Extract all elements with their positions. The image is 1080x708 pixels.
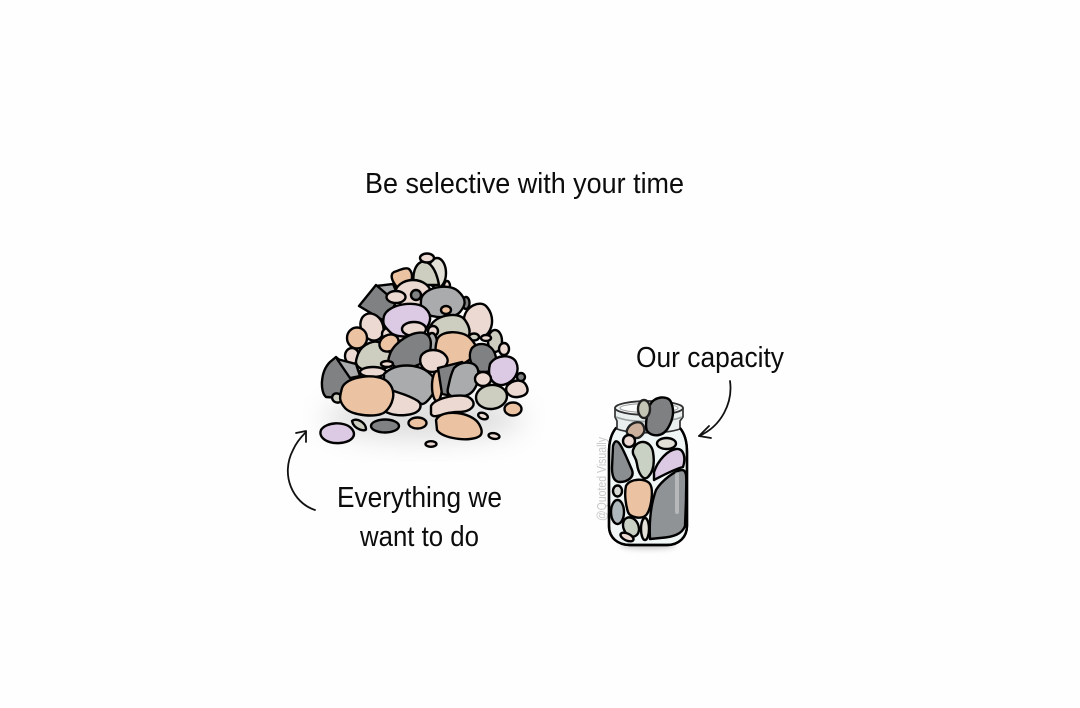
arrow: our capacity [699,381,730,438]
top stones [359,254,492,338]
middle stones [345,304,528,397]
title: Be selective with your time [365,168,684,200]
label: everything we want to do: want to do [359,521,479,553]
jar rim [615,401,683,415]
jar shadow [620,541,676,549]
watermark: @Quoted Visually [595,436,609,521]
jar highlight [675,472,679,514]
arrow: everything we want to do [288,431,315,510]
label: everything we want to do [337,482,502,553]
jar outline [609,428,687,545]
front stones [322,357,522,439]
pile shadow [324,398,524,438]
jar illustration [609,397,687,545]
label: our capacity: Our capacity [636,342,784,374]
scattered pebbles [320,418,500,447]
jar stones [611,397,686,543]
label: everything we want to do: Everything we [337,482,502,514]
jar neck and thread [615,408,683,433]
rock pile illustration [320,254,528,447]
jar body [609,428,687,545]
